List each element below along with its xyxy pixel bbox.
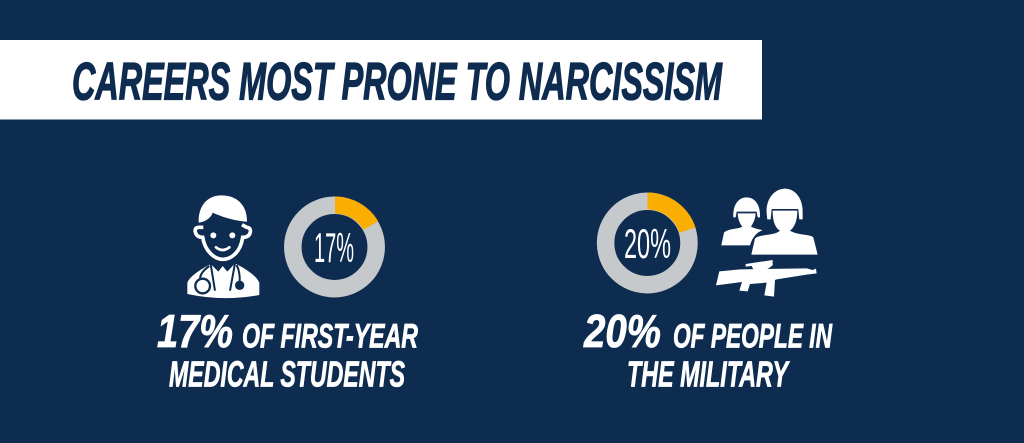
caption: 17% of first-year medical students: OF FIRST-YEAR xyxy=(242,318,418,356)
caption: 17% of first-year medical students: 17% xyxy=(157,305,233,357)
caption: 17% of first-year medical students: MEDICAL STUDENTS xyxy=(169,354,405,394)
caption: 20% of people in the military: THE MILITARY xyxy=(627,354,790,394)
caption: 20% of people in the military xyxy=(583,305,833,394)
title banner xyxy=(0,40,762,120)
donut chart: 20% xyxy=(606,192,696,285)
donut chart: 17%: 17% xyxy=(314,224,354,271)
caption: 17% of first-year medical students xyxy=(157,305,418,394)
caption: 20% of people in the military: OF PEOPLE IN xyxy=(673,318,833,356)
caption: 20% of people in the military: 20% xyxy=(583,305,661,357)
icon: soldiers and rifle xyxy=(716,189,818,297)
icon: doctor xyxy=(187,195,259,298)
donut chart: 20%: 20% xyxy=(624,220,671,267)
donut chart: 17% xyxy=(293,196,378,289)
